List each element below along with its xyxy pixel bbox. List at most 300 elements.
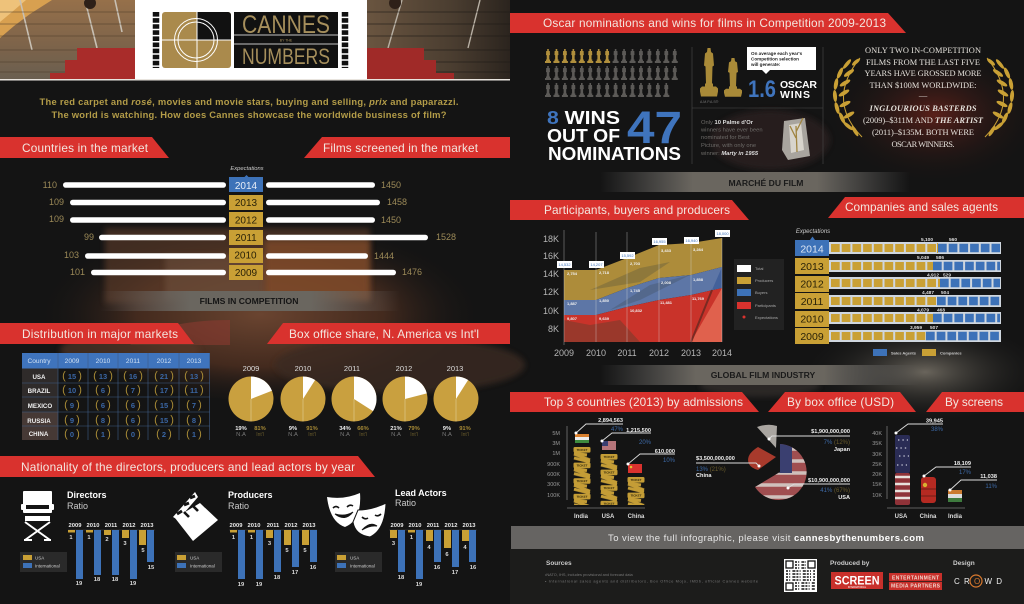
legend: companies chart (873, 349, 962, 356)
callout: average per year: Competition selection (751, 56, 799, 62)
chart: producers: 2013 (303, 523, 316, 529)
table: distribution: ( 16 ) (123, 370, 143, 382)
row 2013: 1458 (387, 197, 407, 207)
legend: directors (20, 552, 67, 572)
stack: China (921, 477, 936, 503)
callout: USA (786, 478, 850, 501)
callout: USA: USA (838, 495, 850, 501)
stat: 1.6 oscar wins: WINS (780, 89, 810, 101)
text: grossed more than $100M: THAN $100M WORLDWIDE: (870, 81, 976, 90)
table: distribution: MEXICO (28, 403, 52, 410)
row 2009: 2009 (235, 268, 258, 279)
row 2010: 468 (937, 308, 945, 314)
row 2010 (64, 248, 394, 263)
chart: directors: 19 (130, 581, 137, 587)
chart: producers: 1 (250, 535, 254, 541)
banner: visit website (511, 526, 1024, 549)
table: distribution: ( 1 ) (95, 428, 111, 440)
area chart: participants, buyers, producers: 2012 (649, 348, 669, 358)
callout: India: 2,894,563 (598, 418, 623, 424)
logo: film strip left (153, 12, 159, 68)
row 2011: 2011 (801, 296, 823, 308)
flag: China (628, 464, 642, 473)
flag: India (575, 434, 589, 443)
logo: wordmark: NUMBERS (242, 44, 330, 69)
lead actors heading (395, 488, 447, 508)
design credit (953, 560, 1002, 587)
chart: directors: 2013 (141, 523, 154, 529)
pie 2011: 66% (357, 426, 369, 432)
text: grossed more than $100M: ONLY TWO IN-COMPETITION (865, 46, 981, 55)
stack: India (948, 490, 962, 502)
pie 2012: 2012 (396, 364, 412, 373)
text: grossed more than $100M: OSCAR WINNERS. (892, 140, 954, 149)
table: distribution: ( 15 ) (154, 414, 174, 426)
pie 2012: 79% (408, 426, 420, 432)
chart: box office exploded pie (696, 425, 851, 501)
icon: two gold oscars: A.M.P.A.S® (700, 100, 719, 104)
producers heading (228, 490, 273, 511)
row 2011 (795, 290, 1001, 309)
chart: screens: 20K (872, 472, 882, 478)
table: distribution: 2010 (96, 358, 111, 365)
table: distribution: ( 6 ) (125, 414, 141, 426)
chart: lead actors (389, 523, 477, 588)
pie 2012 (382, 364, 428, 438)
area chart: participants, buyers, producers: 14K (543, 269, 559, 279)
row 2013 (49, 195, 407, 210)
chart: producers: 16 (310, 565, 317, 571)
chart: lead actors: 17 (452, 570, 458, 576)
producers heading: Producers (228, 490, 273, 500)
area chart: participants, buyers, producers (543, 230, 732, 358)
stat: 1.6 oscar wins (748, 76, 817, 103)
area chart: participants, buyers, producers: 2009 (554, 348, 574, 358)
pie 2009: Int'l (256, 432, 264, 438)
chart: screens: China (920, 514, 937, 520)
area chart: participants, buyers, producers: 16K (543, 251, 559, 261)
intro text (40, 96, 458, 120)
row 2011: 2011 (235, 233, 257, 244)
text: grossed more than $100M (863, 46, 984, 149)
callout: China: 610,000 (655, 449, 675, 455)
table: distribution: ( 7 ) (186, 399, 202, 411)
area chart: participants, buyers, producers: 3,284 (693, 247, 704, 252)
callout: Japan: $1,900,000,000 (811, 429, 850, 435)
text: palme d'or: winner: Marty in 1955 (700, 151, 759, 157)
pie 2013: 9% (443, 426, 451, 432)
section band: marche du film: MARCHÉ DU FILM (729, 178, 803, 188)
area chart: participants, buyers, producers: 18K (543, 234, 559, 244)
table: distribution: ( 1 ) (186, 428, 202, 440)
callout: USA: 1,215,500 (626, 428, 651, 434)
section band: marche du film (600, 172, 910, 192)
chart: directors: 2009 (69, 523, 82, 529)
logo: Entertainment Media Partners (889, 573, 942, 590)
stat: 8 wins out of 47 nominations: 8 WINS (547, 108, 620, 128)
row 2011: 99 (84, 232, 94, 242)
chart: admissions tickets: 600K (547, 472, 560, 478)
sources: Sources (546, 560, 572, 567)
row 2009: 2009 (800, 331, 824, 343)
legend: participants chart: Buyers (755, 290, 767, 295)
chart: directors: 2011 (105, 523, 118, 529)
legend: participants chart (734, 259, 784, 330)
chart: screens: 10K (872, 493, 882, 499)
area chart: participants, buyers, producers: 2,008 (661, 280, 672, 285)
chart: screens: USA (895, 514, 908, 520)
table: distribution: ( 2 ) (156, 428, 172, 440)
legend: producers: International (190, 564, 215, 568)
chart: screens: India (948, 514, 963, 520)
callout: India: 11% (985, 484, 998, 490)
table: distribution: 2009 (65, 358, 80, 365)
chart: admissions tickets (547, 418, 676, 520)
chart: directors: 15 (148, 565, 155, 571)
chart: directors: 5 (141, 548, 145, 554)
row 2011: 504 (941, 290, 949, 296)
heading: films screened in the market (304, 137, 510, 158)
callout: China: 10% (663, 458, 676, 464)
area chart: participants, buyers, producers: 9,807 (567, 316, 578, 321)
table: distribution: 2011 (126, 358, 140, 365)
chart: screens: 25K (872, 462, 882, 468)
table: distribution: USA (32, 374, 46, 381)
chart: lead actors: 19 (416, 582, 423, 588)
intro text: The world is watching. How does Cannes showcase the worldwide business of film? (52, 109, 447, 120)
callout: Japan: Japan (834, 447, 851, 453)
text: grossed more than $100M: (2009)–$311M AND THE ARTIST (863, 116, 984, 125)
area chart: participants, buyers, producers: 8K (548, 324, 559, 334)
heading: by screens (926, 392, 1024, 412)
heading: top 3 admissions (510, 392, 759, 412)
callout: China (922, 461, 972, 478)
table: distribution: ( 21 ) (154, 370, 174, 382)
row 2011: 4,487 (922, 290, 934, 296)
chart: directors: 1 (87, 535, 91, 541)
area chart: participants, buyers, producers: 18,000 (716, 231, 729, 236)
chart: screens (872, 418, 998, 520)
callout: India: 11,038 (980, 474, 997, 480)
chart: lead actors: 18 (398, 575, 405, 581)
chart: directors: 19 (76, 581, 83, 587)
heading: countries in the market (0, 137, 169, 158)
chart: producers: 17 (292, 570, 298, 576)
pie 2009: 19% (235, 426, 247, 432)
slice: Japan (757, 425, 777, 448)
row 2009 (70, 265, 422, 280)
heading: companies: Companies and sales agents (845, 200, 998, 214)
area chart: participants, buyers, producers: 11,481 (660, 300, 673, 305)
heading: box office share: Box office share, N. America vs Int'l (289, 327, 479, 341)
chart: producers: 2010 (248, 523, 260, 529)
row 2012: 109 (49, 214, 64, 224)
chart: lead actors: 16 (470, 565, 477, 571)
flag: USA (602, 441, 616, 450)
footer panel (510, 549, 1024, 604)
chart: directors: 2010 (87, 523, 99, 529)
stack: USA (600, 454, 618, 505)
pie 2013: 2013 (447, 364, 463, 373)
area chart: participants, buyers, producers: 2013 (681, 348, 701, 358)
pie 2009: N.A (236, 432, 246, 438)
section band: films in competition: FILMS IN COMPETITION (200, 296, 298, 306)
area chart: participants, buyers, producers: 14,532 (558, 262, 571, 267)
row 2009: 507 (930, 325, 938, 331)
text: grossed more than $100M: INGLOURIOUS BASTERDS (868, 104, 977, 113)
chart: lead actors: 16 (434, 565, 441, 571)
lead actors heading: Lead Actors (395, 488, 447, 498)
table: distribution: ( 11 ) (184, 384, 204, 396)
pie 2012: 21% (390, 426, 402, 432)
icon: theatre masks (327, 493, 386, 537)
chart: admissions tickets: 300K (547, 482, 560, 488)
row 2010: 2010 (234, 250, 257, 262)
callout: China: 13% (21%) (696, 467, 726, 473)
logo: crosshair emblem (162, 12, 231, 68)
row 2013: 5,049 (917, 255, 929, 261)
pie 2010: 91% (306, 426, 318, 432)
callout: USA (894, 418, 944, 434)
heading: nationality (0, 456, 375, 477)
producer credit (830, 560, 942, 590)
row 2010: 1444 (374, 251, 394, 261)
callout: Japan (768, 429, 851, 453)
pie 2010: 2010 (295, 364, 311, 373)
area chart: participants, buyers, producers: 12K (543, 287, 559, 297)
callout: Japan: 7% (12%) (824, 440, 850, 446)
logo: wordmark: BY THE (280, 38, 293, 42)
area chart: participants, buyers, producers: 10,832 (630, 308, 643, 313)
row 2012: 529 (943, 272, 951, 278)
logo: Screen International: SCREEN (834, 574, 880, 588)
callout: USA: 41% (67%) (820, 488, 850, 494)
chart: admissions tickets: 100K (547, 493, 560, 499)
sources: •NATO, IHS, includes provisional and forecast data (545, 572, 634, 577)
chart: directors: 18 (94, 577, 101, 583)
heading: by screens: By screens (945, 395, 1003, 409)
table: distribution: ( 9 ) (64, 399, 80, 411)
photo backdrop: cinema (35, 210, 525, 400)
row 2014: 110 (43, 180, 57, 190)
icon: clapperboard (173, 492, 218, 541)
chart: producers: 5 (303, 548, 307, 554)
design credit: Design (953, 560, 975, 567)
text: palme d'or (700, 120, 763, 157)
heading: companies (828, 197, 1024, 218)
text: palme d'or: nominated for Best (701, 135, 750, 141)
stat: 8 wins out of 47 nominations: OUT OF (547, 126, 620, 146)
chart: directors: 2 (105, 537, 109, 543)
legend: participants chart: Producers (755, 278, 773, 283)
chart: producers: 18 (274, 575, 281, 581)
row 2009 (795, 325, 1001, 344)
area chart: participants, buyers, producers: 2014 (712, 348, 732, 358)
pie 2012: Int'l (410, 432, 418, 438)
row 2010: 2010 (800, 314, 824, 326)
area chart: participants, buyers, producers: 9,639 (599, 316, 610, 321)
heading: oscar nominations: Oscar nominations and wins for films in Competition 2009-2013 (543, 16, 886, 30)
text: grossed more than $100M: — (918, 91, 928, 100)
photo backdrop: beach market (700, 320, 1024, 424)
row 2014: 5,100 (921, 237, 933, 243)
area chart: participants, buyers, producers: 1,745 (630, 288, 641, 293)
chart: producers: 2011 (267, 523, 280, 529)
chart: directors: 18 (112, 577, 119, 583)
area chart: participants, buyers, producers: 2,718 (599, 270, 610, 275)
area chart: participants, buyers, producers: 3,433 (661, 248, 672, 253)
table: distribution: ( 15 ) (154, 399, 174, 411)
intro text: The red carpet and rosé, movies and movie stars, buying and selling, prix and paparazzi. (40, 96, 458, 107)
pie 2009: 2009 (243, 364, 259, 373)
table: distribution: ( 13 ) (184, 370, 204, 382)
pie 2011: 34% (339, 426, 351, 432)
text: grossed more than $100M: YEARS HAVE GROSSED MORE (864, 69, 982, 78)
legend: participants chart: Expectations (755, 315, 778, 320)
design credit: CR O WD (954, 577, 1002, 586)
callout: USA (600, 428, 652, 446)
area chart: participants, buyers, producers: 1,850 (599, 298, 610, 303)
chart: directors: 2012 (123, 523, 135, 529)
sources (545, 560, 758, 584)
pie 2009 (228, 364, 274, 438)
row 2014: 2014 (800, 244, 824, 256)
area chart: participants, buyers, producers: 2,703 (630, 261, 641, 266)
table: distribution: CHINA (29, 431, 49, 438)
callout: China (696, 456, 760, 479)
row 2011 (84, 230, 456, 245)
area chart: participants, buyers, producers: 16,940 (685, 238, 698, 243)
callout: India: 47% (611, 427, 624, 433)
row 2010: 4,079 (917, 308, 929, 314)
heading: distribution in major markets: Distribution in major markets (22, 327, 178, 341)
callout: average per year (747, 47, 816, 74)
table: distribution: ( 10 ) (62, 384, 82, 396)
QR code (784, 559, 817, 592)
section band: global film industry: GLOBAL FILM INDUSTRY (711, 370, 816, 380)
chart: lead actors: 2013 (463, 523, 476, 529)
chart: producers: 2009 (230, 523, 243, 529)
chart: directors (68, 523, 155, 587)
pie 2010: Int'l (308, 432, 316, 438)
text: palme d'or: winners have ever been (700, 128, 763, 134)
callout: USA: 38% (931, 427, 944, 433)
chart: companies and sales agents (795, 229, 1001, 344)
stat: 1.6 oscar wins: 1.6 (748, 76, 776, 103)
pie 2011: N.A (340, 432, 350, 438)
callout: China: China (696, 473, 712, 479)
heading: participants: Participants, buyers and producers (544, 203, 730, 217)
chart: admissions tickets: China (628, 514, 645, 520)
table: distribution: ( 9 ) (64, 414, 80, 426)
chart: producers: 3 (268, 541, 272, 547)
slice: China (748, 447, 776, 470)
heading: participants (510, 200, 749, 220)
table: distribution: ( 17 ) (154, 384, 174, 396)
heading: oscar nominations (510, 13, 906, 33)
legend: lead actors (335, 552, 382, 572)
area chart: participants, buyers, producers: 14,207 (590, 262, 603, 267)
chart: admissions tickets: 5M (552, 431, 560, 437)
section band: films in competition (100, 291, 400, 311)
chart: lead actors: 2009 (391, 523, 404, 529)
table: distribution: ( 0 ) (125, 428, 141, 440)
callout: USA: 39,945 (926, 418, 943, 424)
table: distribution: ( 7 ) (125, 384, 141, 396)
row 2013: 2013 (800, 261, 824, 273)
slice: USA (755, 444, 807, 500)
pie 2013: 91% (459, 426, 471, 432)
row 2014: 560 (949, 237, 957, 243)
callout: India (948, 474, 998, 492)
legend: lead actors: USA (350, 556, 359, 560)
row 2011: 1528 (436, 232, 456, 242)
pie 2011 (332, 364, 377, 438)
logo: film strip right (342, 12, 348, 68)
chart: screens: 35K (872, 441, 882, 447)
lead actors heading: Ratio (395, 498, 416, 508)
callout: USA: $10,900,000,000 (808, 478, 850, 484)
chart: admissions tickets: 3M (552, 441, 560, 447)
pie 2011: Int'l (359, 432, 367, 438)
heading: distribution in major markets (0, 323, 194, 344)
legend: directors: USA (35, 556, 44, 560)
heading: top 3 admissions: Top 3 countries (2013) by admissions (544, 395, 743, 409)
chart: producers: 1 (232, 535, 236, 541)
heading: box office share (267, 323, 510, 344)
row 2010 (795, 308, 1001, 327)
row 2009: 101 (70, 267, 85, 277)
table: distribution: Country (27, 358, 51, 365)
table: distribution: 2013 (187, 358, 202, 365)
heading: by box office (768, 392, 916, 412)
legend: producers: USA (190, 556, 199, 560)
stat: 1.6 oscar wins: OSCAR (780, 79, 817, 91)
icon: palme d'or crystal (782, 118, 810, 160)
row 2013 (795, 255, 1001, 274)
text: palme d'or: Only 10 Palme d'Or (701, 120, 754, 126)
table: distribution: ( 15 ) (62, 370, 82, 382)
table: distribution (22, 353, 210, 440)
table: distribution: ( 6 ) (125, 399, 141, 411)
chart: lead actors: 3 (392, 541, 396, 547)
icon: director chair (21, 491, 54, 540)
chart: producers: 19 (238, 582, 245, 588)
row 2012: 2012 (235, 216, 258, 226)
stack: China (627, 477, 645, 505)
logo: Entertainment Media Partners: MEDIA PARTNERS (891, 584, 941, 590)
callout: China (626, 449, 676, 466)
laurel right (985, 57, 1015, 137)
chart: lead actors: 2012 (445, 523, 457, 529)
pie charts: box office share (228, 364, 478, 438)
row 2013: 2013 (235, 198, 258, 209)
text: grossed more than $100M: FILMS FROM THE LAST FIVE (866, 58, 980, 67)
text: palme d'or: Picture, with only one (701, 143, 756, 149)
table: distribution: ( 0 ) (64, 428, 80, 440)
callout: USA: 20% (639, 440, 652, 446)
chart: directors: 1 (69, 535, 73, 541)
pie 2010: 9% (289, 426, 297, 432)
row 2013: 109 (49, 197, 64, 207)
pie 2011: 2011 (344, 364, 360, 373)
chart: producers: 2012 (285, 523, 297, 529)
laurel left (832, 57, 862, 137)
heading: by box office: By box office (USD) (787, 395, 894, 409)
callout: China: $3,500,000,000 (696, 456, 735, 462)
chart: lead actors: 6 (445, 552, 449, 558)
area chart: participants, buyers, producers: 16,955 (653, 239, 666, 244)
